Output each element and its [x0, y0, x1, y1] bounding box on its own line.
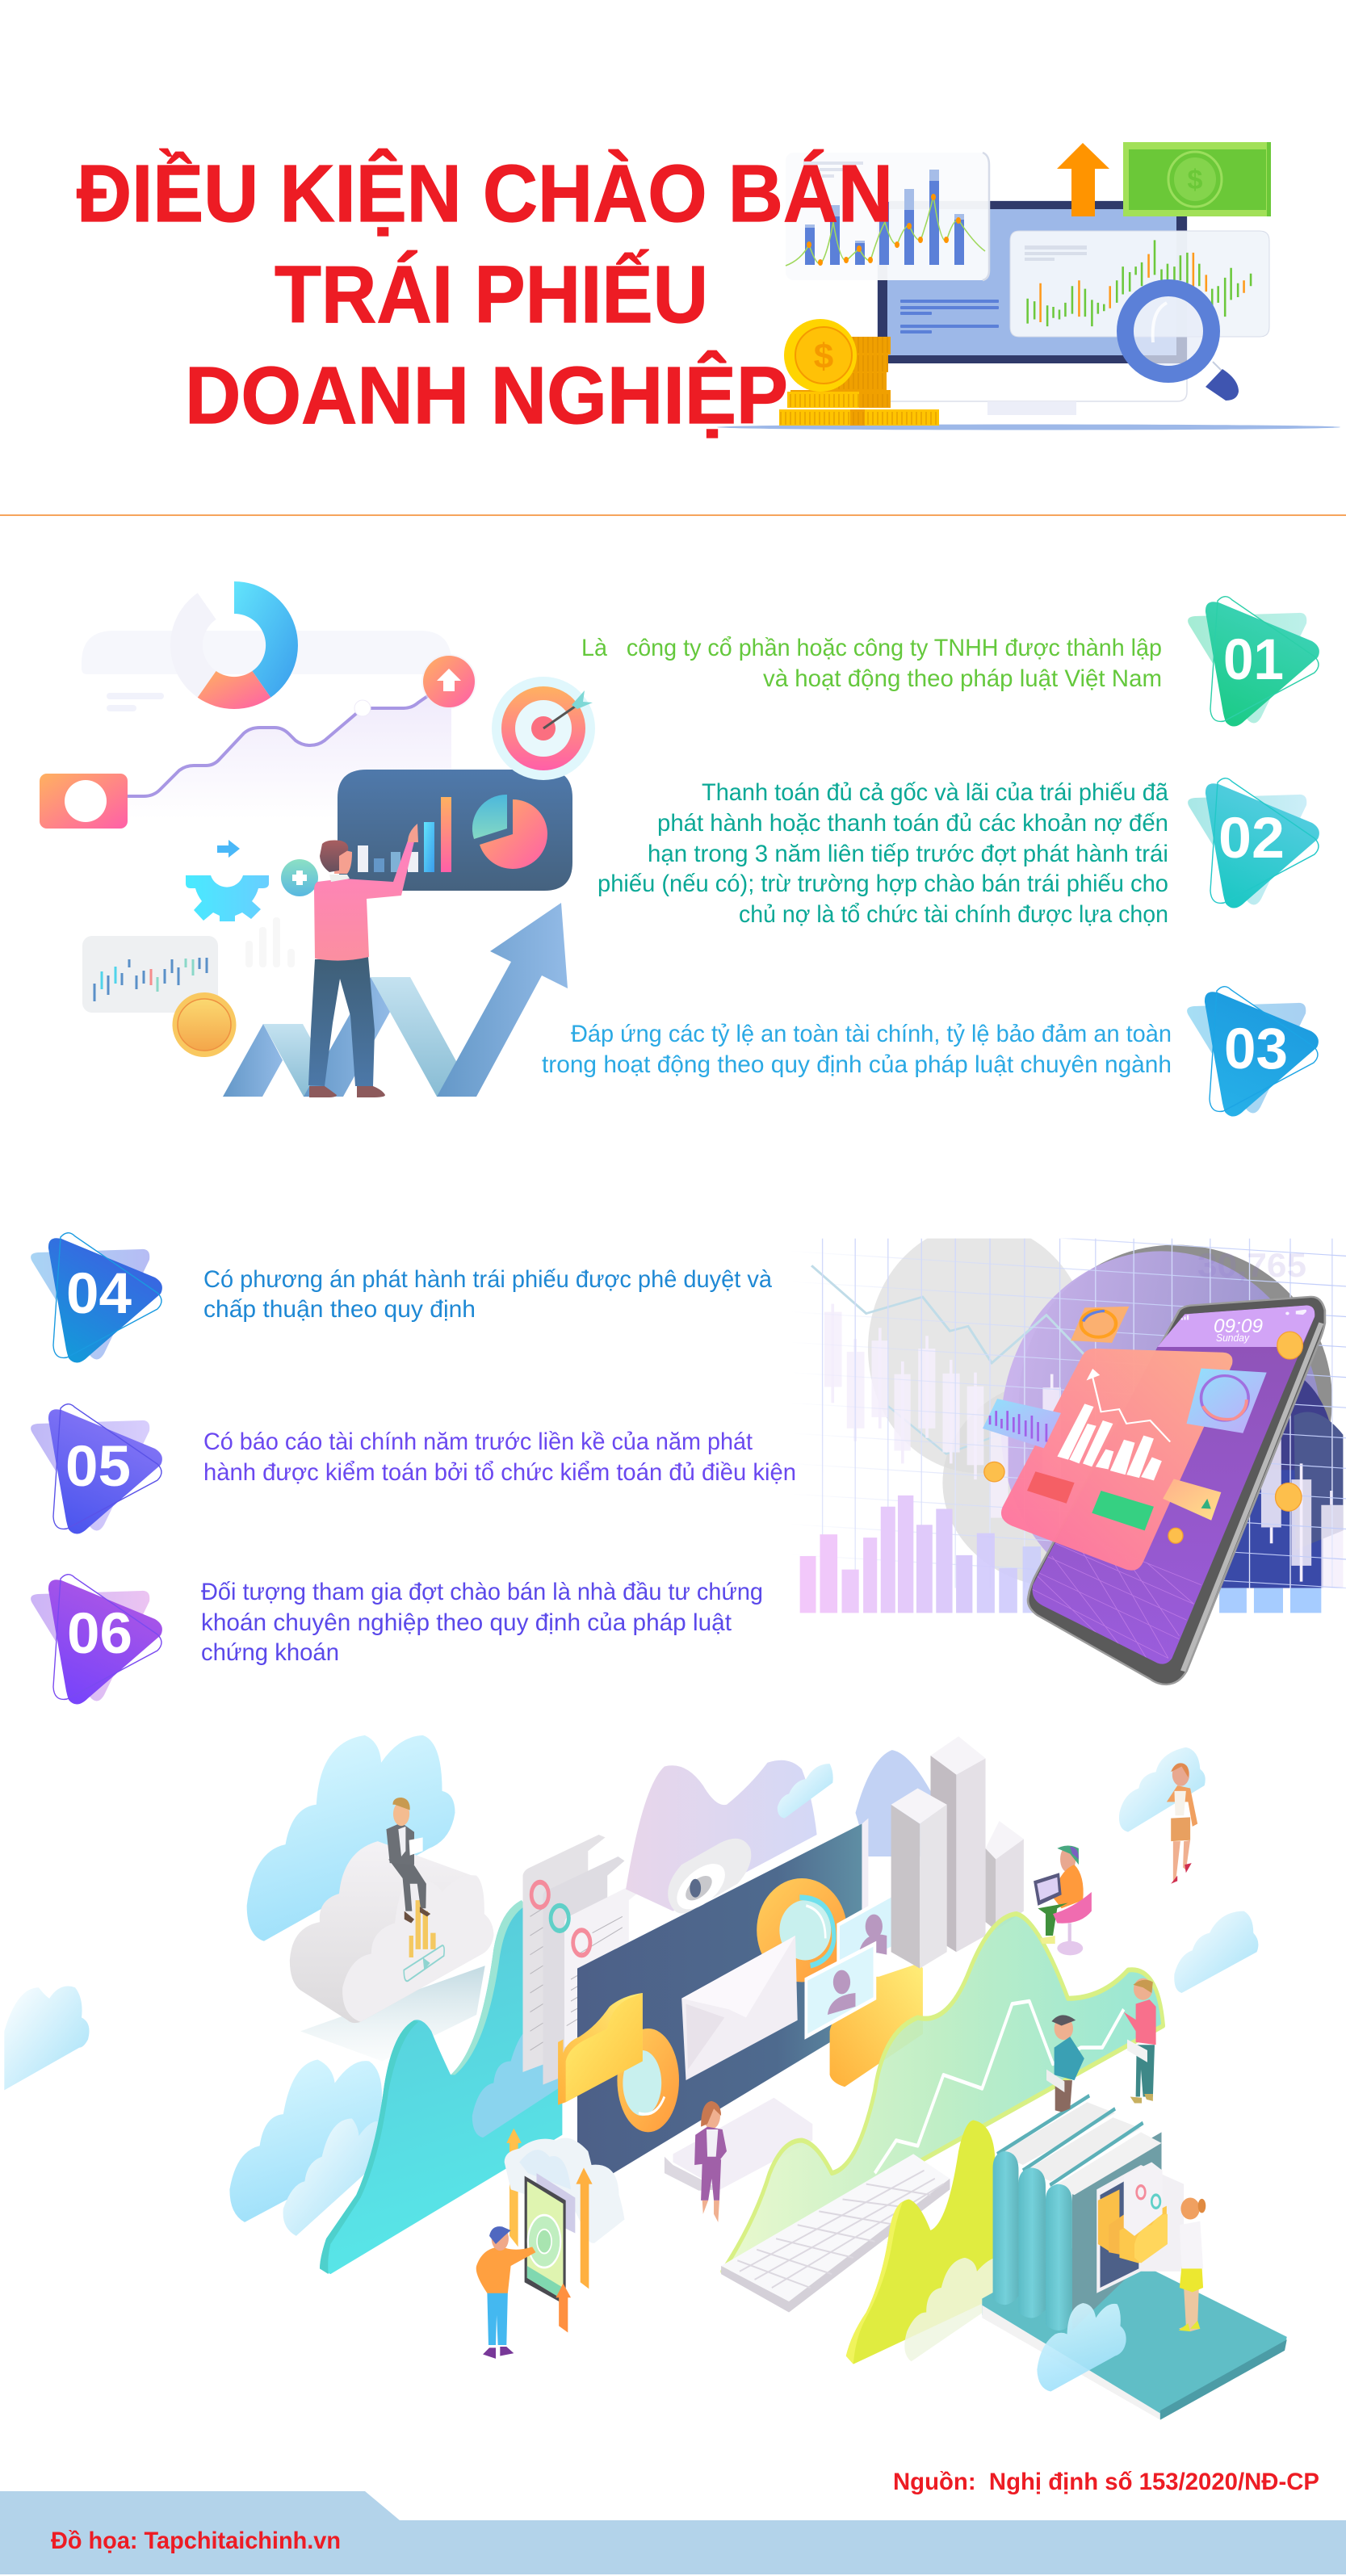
- header illustration: monitor, charts, coins and money: [717, 142, 1340, 430]
- item 01 text: và hoạt động theo pháp luật Việt Nam: [763, 665, 1162, 692]
- item 03 text: Đáp ứng các tỷ lệ an toàn tài chính, tỷ lệ bảo đảm an toàn: [571, 1021, 1172, 1047]
- item 02 text: [598, 779, 1168, 928]
- phone clock: 09:09: [1214, 1315, 1263, 1337]
- item 01 text: [581, 635, 1162, 692]
- title: TRÁI PHIẾU: [275, 250, 708, 340]
- phone clock: Sunday: [1216, 1332, 1250, 1344]
- title: DOANH NGHIỆP: [185, 350, 788, 441]
- item 05 text: hành được kiểm toán bởi tổ chức kiểm toán đủ điều kiện: [203, 1459, 796, 1486]
- item 02 text: chủ nợ là tổ chức tài chính được lựa chọn: [739, 901, 1168, 928]
- item 02 text: hạn trong 3 năm liên tiếp trước đợt phát hành trái: [648, 841, 1168, 867]
- badge 01: 01: [1223, 628, 1284, 692]
- item 04 text: [203, 1266, 772, 1323]
- badge 04: [31, 1233, 162, 1363]
- left illustration: person at chart board: [40, 581, 595, 1097]
- badge 06: [31, 1575, 162, 1705]
- badge 06: 06: [67, 1602, 132, 1666]
- item 02 text: phát hành hoặc thanh toán đủ các khoản nợ đến: [657, 810, 1168, 837]
- footer band: [0, 2491, 1346, 2574]
- faint market number: 30,765: [1197, 1246, 1306, 1284]
- badge 04: 04: [66, 1262, 132, 1326]
- badge 02: 02: [1218, 807, 1285, 871]
- item 06 text: khoán chuyên nghiệp theo quy định của pháp luật: [201, 1609, 732, 1636]
- money symbol: $: [1188, 165, 1203, 195]
- item 04 text: Có phương án phát hành trái phiếu được phê duyệt và: [203, 1266, 772, 1293]
- title: ĐIỀU KIỆN CHÀO BÁN: [77, 149, 893, 239]
- item 01 text: Là công ty cổ phần hoặc công ty TNHH được thành lập: [581, 635, 1162, 661]
- item 02 text: Thanh toán đủ cả gốc và lãi của trái phiếu đã: [702, 779, 1168, 806]
- item 05 text: [203, 1429, 796, 1486]
- item 03 text: trong hoạt động theo quy định của pháp luật chuyên ngành: [542, 1051, 1172, 1078]
- item 02 text: phiếu (nếu có); trừ trường hợp chào bán trái phiếu cho: [598, 871, 1168, 897]
- badge 03: 03: [1224, 1017, 1288, 1081]
- item 06 text: Đối tượng tham gia đợt chào bán là nhà đầu tư chứng: [201, 1579, 763, 1605]
- item 06 text: [201, 1579, 763, 1666]
- item 05 text: Có báo cáo tài chính năm trước liền kề của năm phát: [203, 1429, 753, 1455]
- item 03 text: [542, 1021, 1172, 1078]
- coin symbol: $: [814, 337, 833, 376]
- source note: Nguồn: Nghị định số 153/2020/NĐ-CP: [893, 2469, 1319, 2495]
- graphics credit: Đồ họa: Tapchitaichinh.vn: [51, 2528, 341, 2554]
- badge 05: 05: [65, 1435, 131, 1499]
- title: [77, 149, 893, 441]
- isometric data illustration: [4, 1735, 1287, 2420]
- item 06 text: chứng khoán: [201, 1639, 339, 1666]
- badge 01: [1188, 597, 1319, 727]
- phone illustration with market chart background: [790, 1221, 1346, 1684]
- badge 03: [1187, 987, 1319, 1117]
- badge 02: [1188, 778, 1319, 908]
- badge 05: [31, 1404, 162, 1534]
- item 04 text: chấp thuận theo quy định: [203, 1296, 476, 1323]
- divider line: [0, 514, 1346, 516]
